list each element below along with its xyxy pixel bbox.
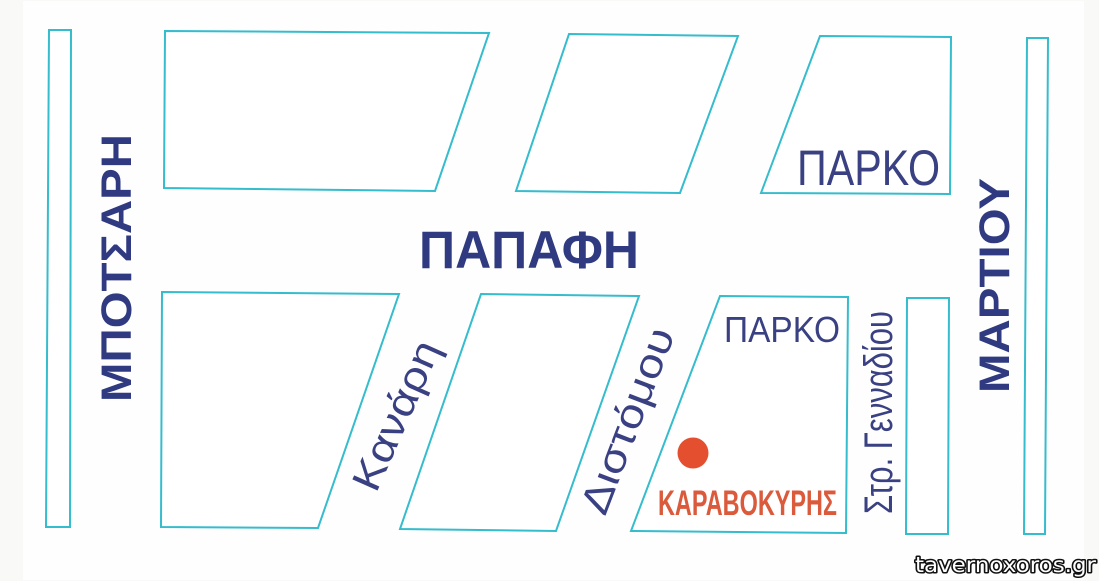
block: bottom right park [631,296,848,533]
block: top right park [761,36,951,194]
street label: Papafi: ΠΑΠΑΦΗ [419,221,639,280]
park label: bottom right: ΠΑΡΚΟ [724,309,840,350]
location label: Karavokyris: ΚΑΡΑΒΟΚΥΡΗΣ [658,484,837,523]
location marker [678,438,708,468]
park label: top right: ΠΑΡΚΟ [797,140,940,196]
block: top middle [516,34,738,193]
street label: Str. Gennadiou: Στρ. Γενναδίου [857,311,901,514]
watermark: tavernoxoros.gr [915,553,1096,577]
block: bottom middle [400,294,639,531]
block: top left [164,31,489,191]
block: far right strip [1024,38,1048,534]
block: bottom left [161,292,399,528]
street label: Mpotsari: ΜΠΟΤΣΑΡΗ [93,134,141,402]
street label: Martiou: ΜΑΡΤΙΟΥ [971,178,1019,393]
block: far left strip [46,30,71,527]
block: Gennadiou strip [906,298,949,534]
street label: Kanari: Κανάρη [344,334,449,498]
city blocks [46,30,1048,534]
street label: Distomou: Διστόμου [572,321,684,520]
